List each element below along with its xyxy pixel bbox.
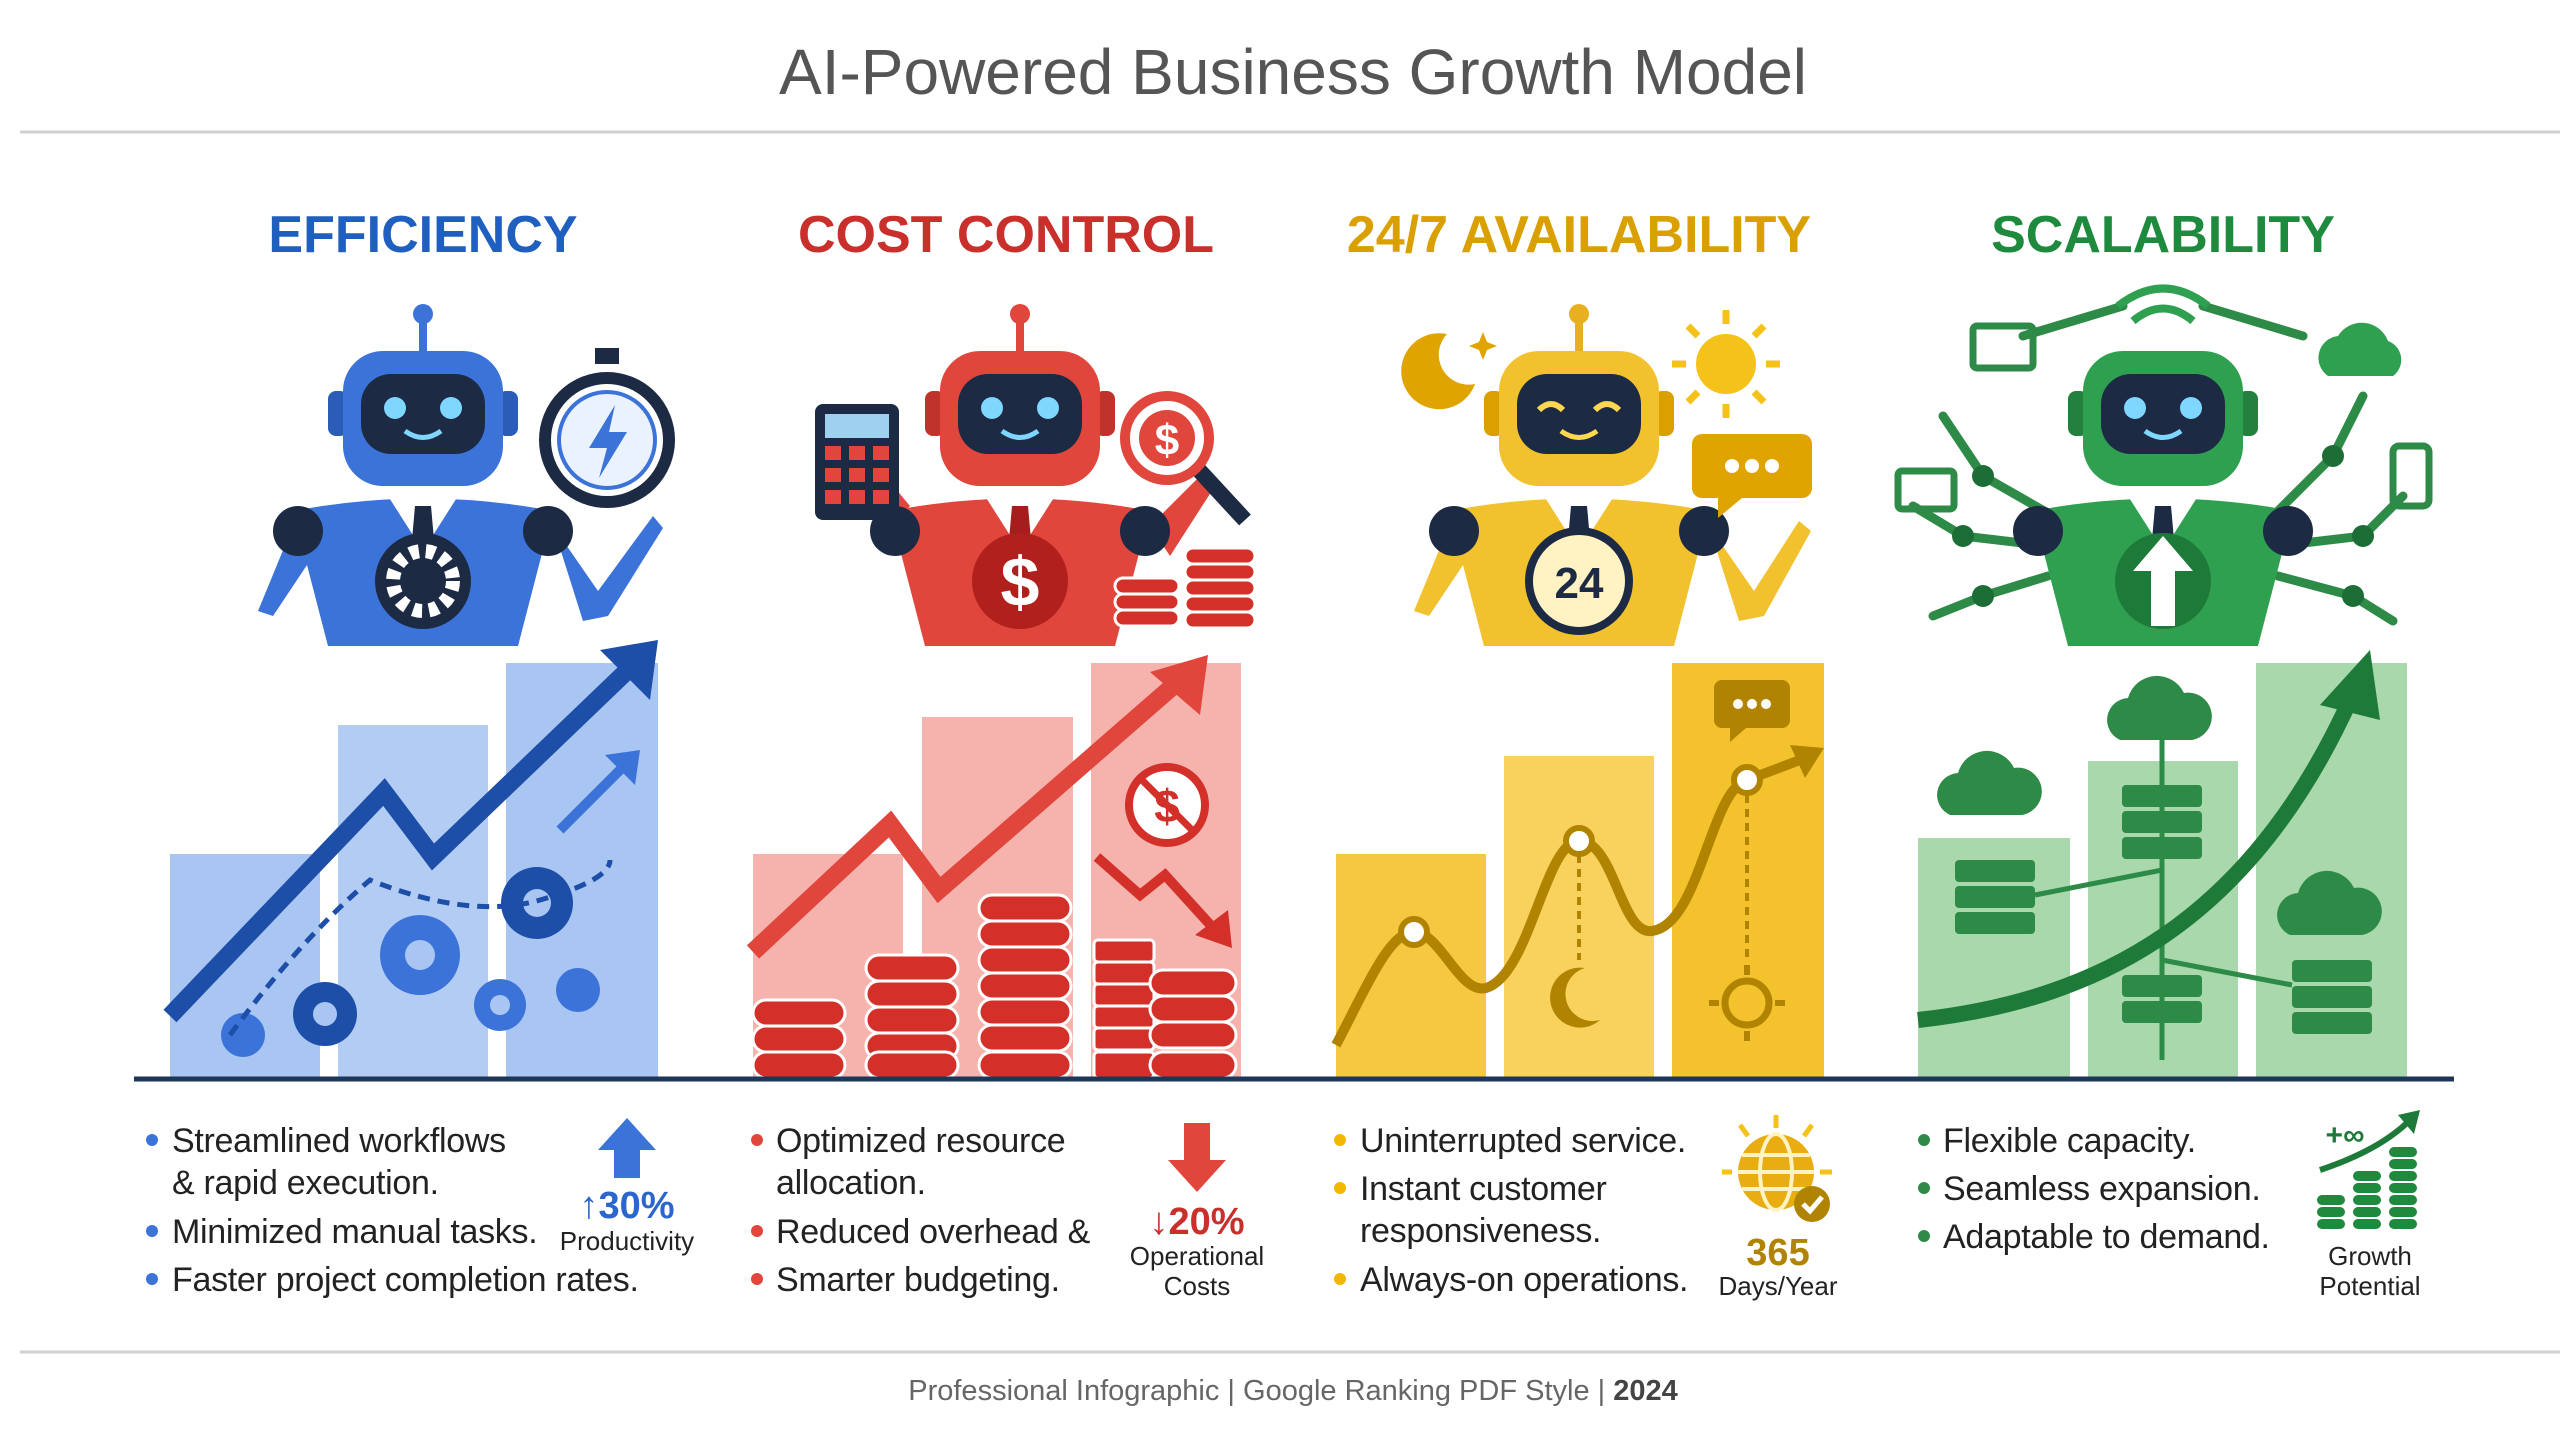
bullets: availability: Instant customer [1360,1170,1607,1208]
icon: chat bubble [1692,434,1812,518]
footer: Professional Infographic | Google Ranking PDF Style | 2024 [908,1375,1678,1407]
bullets: scalability [1918,1122,2270,1256]
bullets: cost control: Optimized resource [776,1122,1065,1160]
robot: efficiency [258,304,663,646]
robot: availability [1414,304,1811,646]
stat: 365 days: 365 [1746,1232,1810,1274]
stat: growth potential [2316,1110,2421,1301]
stat: growth potential: Potential [2319,1271,2421,1301]
bullets: efficiency: Minimized manual tasks. [172,1213,537,1251]
robot: cost control: $ [1001,543,1039,621]
heading: scalability: SCALABILITY [1991,206,2335,264]
bullets: availability: Uninterrupted service. [1360,1122,1686,1160]
bullets: scalability: Adaptable to demand. [1943,1218,2270,1256]
stat: growth potential: Growth [2328,1241,2412,1271]
icon: dollar magnifier: $ [1155,416,1179,465]
bullets: availability [1334,1122,1688,1299]
bullets: scalability: Flexible capacity. [1943,1122,2196,1160]
stat: operational costs: Operational [1130,1241,1264,1271]
robot: scalability [1898,288,2429,646]
icon: moon [1401,332,1497,409]
bullets: cost control: Reduced overhead & [776,1213,1091,1251]
bullets: availability: Always-on operations. [1360,1261,1688,1299]
icon: calculator [815,404,899,520]
chart: efficiency [170,640,658,1079]
chart: cost control [753,655,1241,1079]
chart: scalability [1918,650,2407,1079]
icon: dollar magnifier [1125,396,1245,520]
stat: operational costs: ↓20% [1149,1201,1245,1243]
stat: productivity: Productivity [560,1226,694,1256]
chart: cost control: $ [1154,780,1180,832]
bullets: cost control: Smarter budgeting. [776,1261,1060,1299]
heading: efficiency: EFFICIENCY [268,206,578,264]
robot: availability: 24 [1555,559,1604,608]
heading: cost control: COST CONTROL [798,206,1214,264]
bullets: efficiency: Faster project completion rates. [172,1261,639,1299]
bullets: availability: responsiveness. [1360,1212,1601,1250]
stat: productivity: ↑30% [579,1185,675,1227]
bullets: cost control: allocation. [776,1164,926,1202]
robot: cost control [845,304,1215,646]
stat: growth potential: +∞ [2326,1119,2364,1152]
heading: availability: 24/7 AVAILABILITY [1347,206,1811,264]
bullets: efficiency [146,1122,639,1299]
baseline [134,1076,2454,1082]
bullets: cost control [751,1122,1091,1299]
chart: availability [1336,663,1824,1079]
bullets: scalability: Seamless expansion. [1943,1170,2260,1208]
bullets: efficiency: & rapid execution. [172,1164,439,1202]
stat: 365 days [1718,1115,1838,1301]
stat: productivity [560,1118,694,1256]
icon: sun [1672,310,1780,418]
bullets: efficiency: Streamlined workflows [172,1122,506,1160]
icon: coin stacks [1115,548,1255,628]
stat: operational costs [1130,1123,1264,1301]
stat: 365 days: Days/Year [1718,1271,1838,1301]
stat: operational costs: Costs [1164,1271,1230,1301]
icon: stopwatch [545,348,669,502]
title: AI-Powered Business Growth Model [779,36,1807,108]
